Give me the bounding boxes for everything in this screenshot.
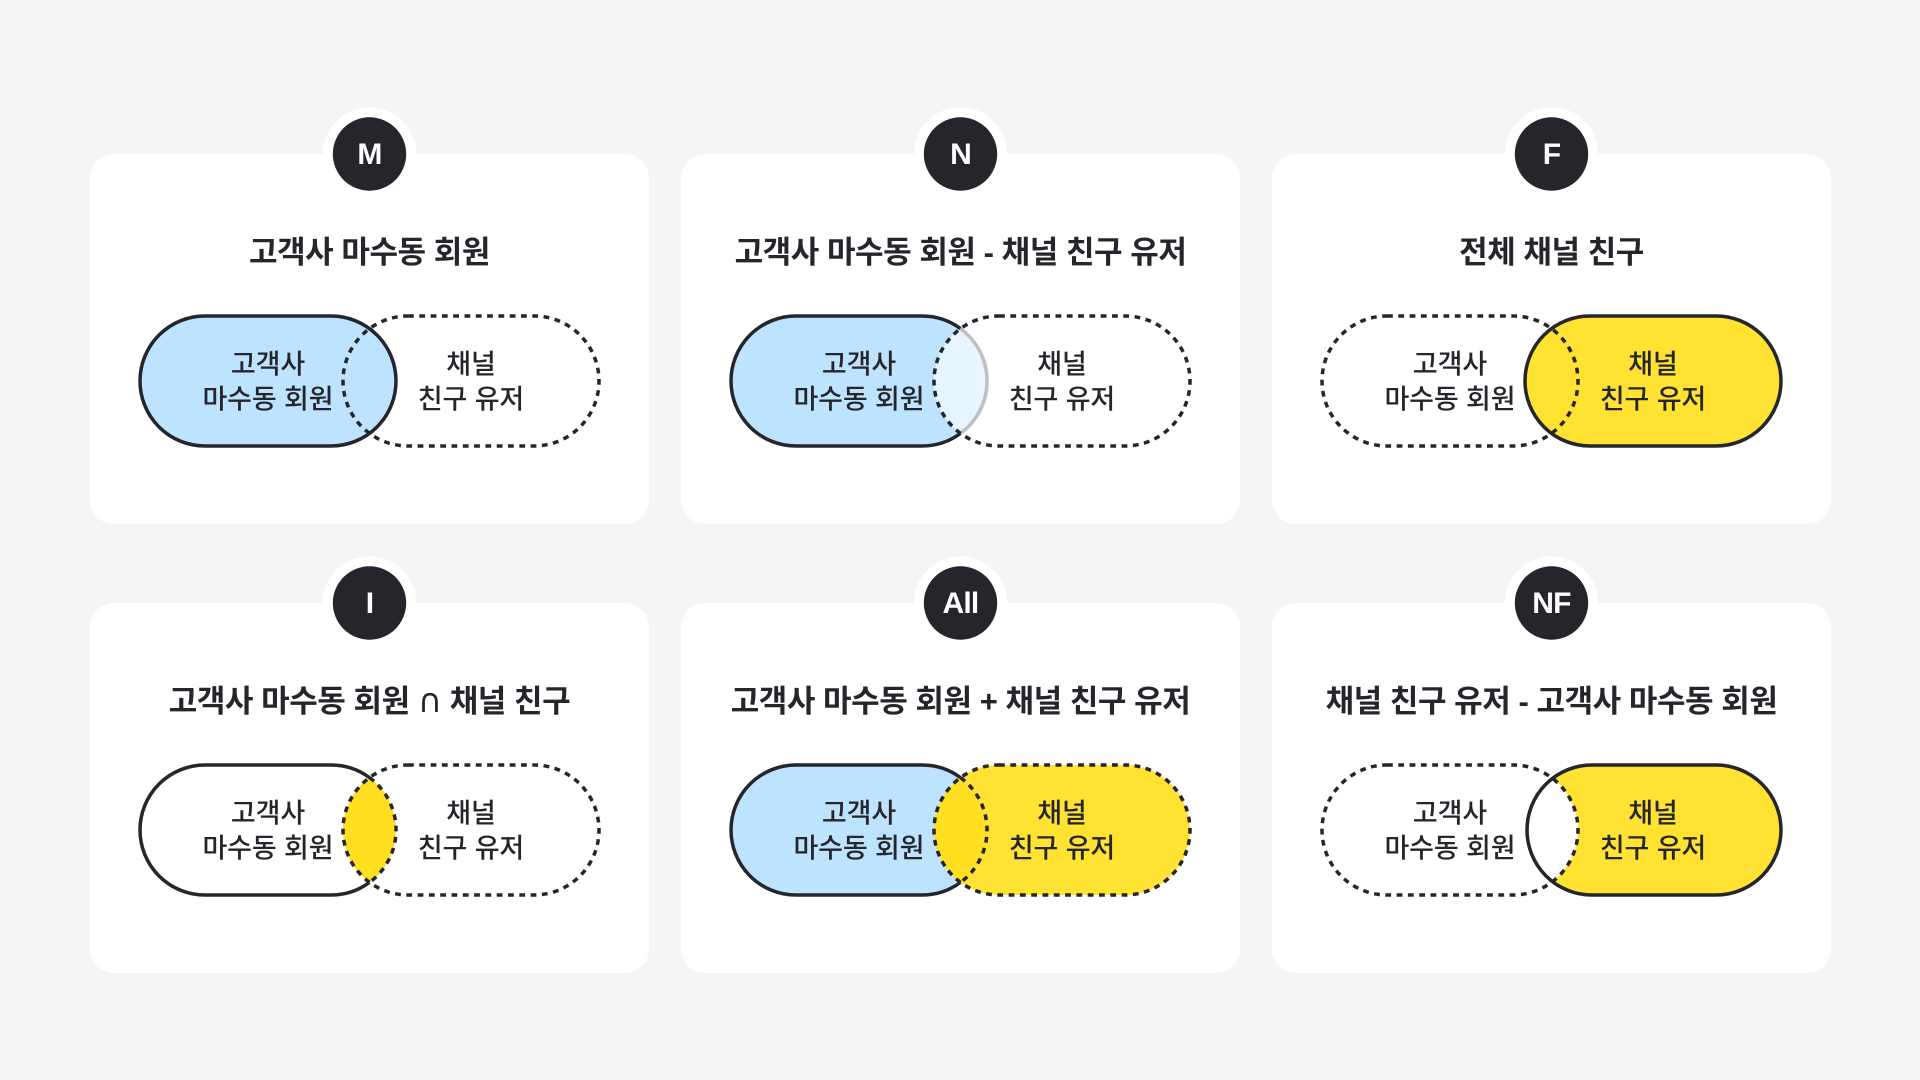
venn diagram: 친구 유저 — [1600, 834, 1706, 864]
badge: N — [914, 107, 1007, 202]
card background — [1272, 154, 1831, 524]
card background — [681, 154, 1240, 524]
panel: NF — [1272, 556, 1831, 973]
venn diagram: 친구 유저 — [418, 834, 524, 864]
badge: All — [914, 556, 1007, 651]
venn diagram — [140, 316, 599, 446]
venn diagram: 채널 — [1628, 350, 1678, 380]
venn diagram: 고객사 — [822, 798, 896, 828]
venn diagram: 마수동 회원 — [793, 384, 925, 414]
venn diagram: 고객사 — [1413, 798, 1487, 828]
venn diagram: 채널 — [1628, 798, 1678, 828]
venn diagram: 고객사 — [231, 350, 305, 380]
venn diagram — [731, 316, 1190, 446]
venn diagram — [731, 765, 1190, 895]
badge: NF — [1505, 556, 1598, 651]
venn diagram: 친구 유저 — [1009, 384, 1115, 414]
venn diagram: 고객사 — [822, 350, 896, 380]
heading: 전체 채널 친구 — [1459, 235, 1644, 270]
venn diagram: 채널 — [1037, 350, 1087, 380]
venn diagram — [140, 765, 599, 895]
panel: I — [90, 556, 649, 973]
badge: All: All — [943, 587, 978, 620]
venn diagram: 채널 — [446, 798, 496, 828]
panel: F — [1272, 107, 1831, 524]
badge: M — [323, 107, 416, 202]
venn diagram: 마수동 회원 — [1384, 384, 1516, 414]
venn diagram: 친구 유저 — [418, 384, 524, 414]
venn diagram: 마수동 회원 — [202, 834, 334, 864]
badge: I — [323, 556, 416, 651]
card background — [90, 154, 649, 524]
panel: N — [681, 107, 1240, 524]
venn diagram: 고객사 — [1413, 350, 1487, 380]
venn diagram: 채널 — [446, 350, 496, 380]
heading: 고객사 마수동 회원 + 채널 친구 유저 — [731, 684, 1190, 719]
heading: 고객사 마수동 회원 ∩ 채널 친구 — [169, 681, 570, 720]
card background — [1272, 603, 1831, 973]
card background — [90, 603, 649, 973]
venn diagram: 마수동 회원 — [1384, 834, 1516, 864]
badge: N: N — [950, 138, 971, 171]
venn diagram: 고객사 — [231, 798, 305, 828]
badge: NF: NF — [1532, 587, 1571, 620]
venn diagram: 친구 유저 — [1600, 384, 1706, 414]
venn diagram: 마수동 회원 — [793, 834, 925, 864]
badge: F: F — [1543, 138, 1561, 171]
venn diagram — [1322, 316, 1781, 446]
venn diagram — [1322, 765, 1781, 895]
badge: F — [1505, 107, 1598, 202]
venn diagram: 채널 — [1037, 798, 1087, 828]
badge: M: M — [357, 138, 382, 171]
panel: M — [90, 107, 649, 524]
badge: I: I — [366, 587, 373, 620]
heading: 고객사 마수동 회원 — [249, 235, 490, 270]
card background — [681, 603, 1240, 973]
panel: All — [681, 556, 1240, 973]
venn diagram: 친구 유저 — [1009, 834, 1115, 864]
heading: 채널 친구 유저 - 고객사 마수동 회원 — [1326, 684, 1777, 719]
venn diagram: 마수동 회원 — [202, 384, 334, 414]
heading: 고객사 마수동 회원 - 채널 친구 유저 — [735, 235, 1186, 270]
